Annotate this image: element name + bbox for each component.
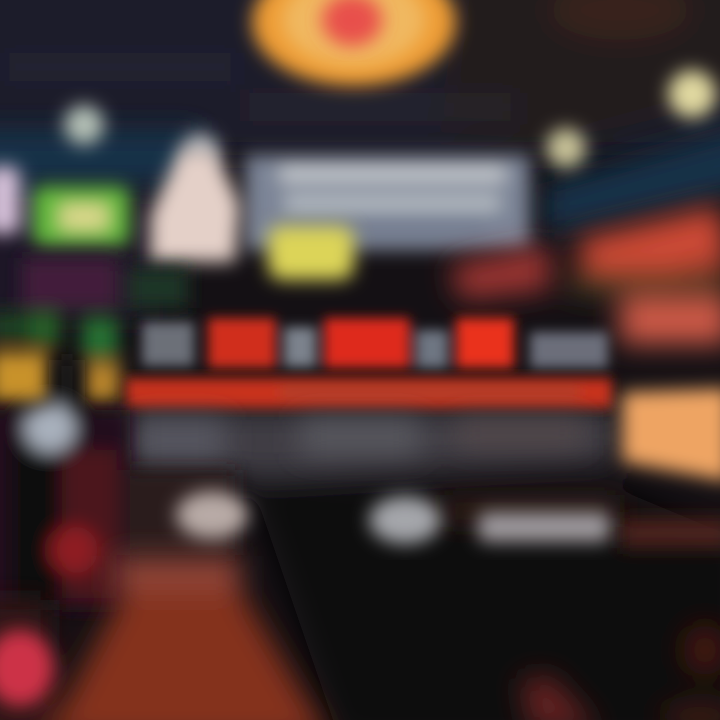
white menu board <box>245 155 530 250</box>
left column panels <box>0 258 188 402</box>
red stool <box>0 630 54 706</box>
blue wall bands <box>0 125 720 320</box>
counter details <box>135 420 620 519</box>
white counter items <box>176 491 610 544</box>
counter front <box>125 410 720 720</box>
lit signs row <box>0 150 354 280</box>
ceiling lights <box>64 70 716 168</box>
ceiling sign: orange disc <box>252 0 456 86</box>
lower right red accents <box>520 624 720 720</box>
right lit orange panel <box>620 388 720 548</box>
floor <box>0 556 330 720</box>
left area and person <box>0 360 235 610</box>
ceiling <box>0 0 720 155</box>
red menu panels and grey dividers <box>142 318 608 368</box>
right red wall display <box>450 205 720 344</box>
red counter banner <box>126 378 612 408</box>
